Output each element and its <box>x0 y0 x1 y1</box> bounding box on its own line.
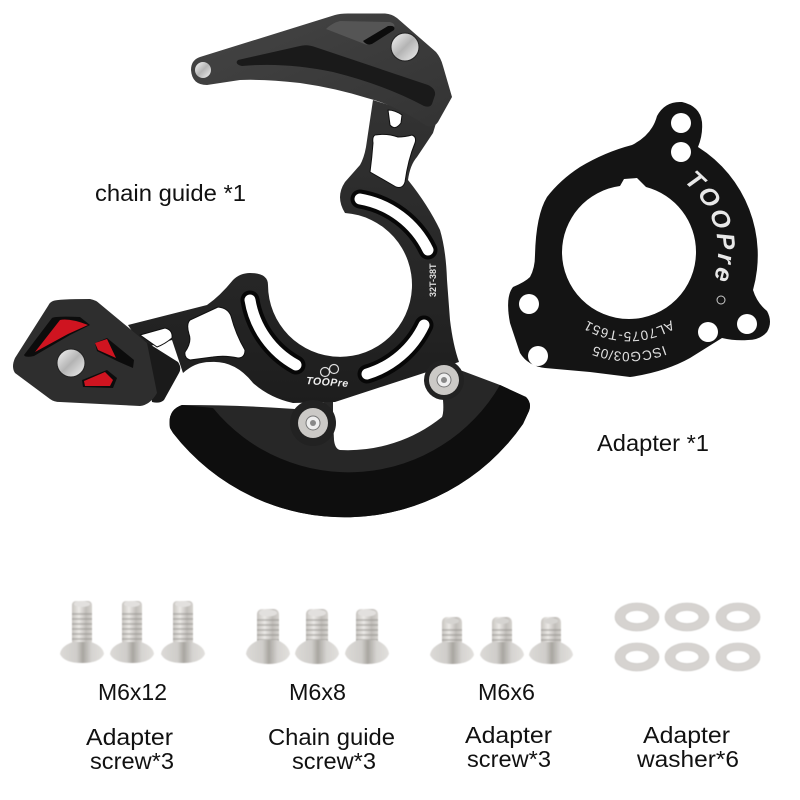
hardware: washers <box>615 603 760 671</box>
slot: right arc <box>367 325 424 374</box>
hardware: M6x12 screws <box>60 601 205 663</box>
engraved logo <box>306 364 349 390</box>
caption: adapter washer <box>636 722 739 772</box>
slot: upper arc <box>360 199 428 250</box>
engraved size label: 32T-38T <box>428 263 438 297</box>
panel: adapter plate <box>508 102 770 377</box>
bolt tensioner <box>57 349 85 377</box>
caption: adapter screw M6x6 <box>465 722 552 772</box>
slot: left arc <box>250 300 296 365</box>
size labels: M6x6 <box>478 679 535 705</box>
caption: chain guide screw: screw*3 <box>292 748 376 774</box>
caption: adapter screw M6x6: screw*3 <box>467 746 551 772</box>
lower tensioner with red roller <box>13 299 180 406</box>
bolt large <box>391 33 419 61</box>
label: chain guide: chain guide *1 <box>95 180 246 206</box>
adapter logo: TOOPre <box>687 170 735 282</box>
lower bash guard <box>170 370 530 517</box>
caption: chain guide screw <box>268 724 395 774</box>
caption: adapter screw M6x12: Adapter <box>86 724 173 750</box>
mounting plate with slots <box>128 100 459 403</box>
hardware: M6x8 screws <box>246 609 389 664</box>
adapter engraving: alloy: AL7075-T651 <box>586 320 672 342</box>
caption: chain guide screw: Chain guide <box>268 724 395 750</box>
size labels: M6x12 <box>98 679 167 705</box>
plate bolts <box>290 360 464 446</box>
hardware: M6x6 screws <box>430 617 573 664</box>
caption: adapter washer: washer*6 <box>636 746 739 772</box>
adapter body <box>508 102 770 377</box>
panel: chain guide product <box>13 14 530 517</box>
size labels: M6x8 <box>289 679 346 705</box>
caption: adapter screw M6x12: screw*3 <box>90 748 174 774</box>
caption: adapter screw M6x6: Adapter <box>465 722 552 748</box>
size labels <box>98 679 535 705</box>
bolt small <box>195 62 211 78</box>
caption: adapter washer: Adapter <box>643 722 730 748</box>
adapter engraving: standard: ISCG03/05 <box>592 346 666 362</box>
engraved logo: TOOPre <box>306 375 349 390</box>
top chain guide <box>191 14 452 126</box>
cut-outs <box>140 110 416 360</box>
guard window <box>333 370 443 450</box>
registered mark <box>717 296 725 304</box>
label: adapter: Adapter *1 <box>597 430 709 456</box>
caption: adapter screw M6x12 <box>86 724 174 774</box>
